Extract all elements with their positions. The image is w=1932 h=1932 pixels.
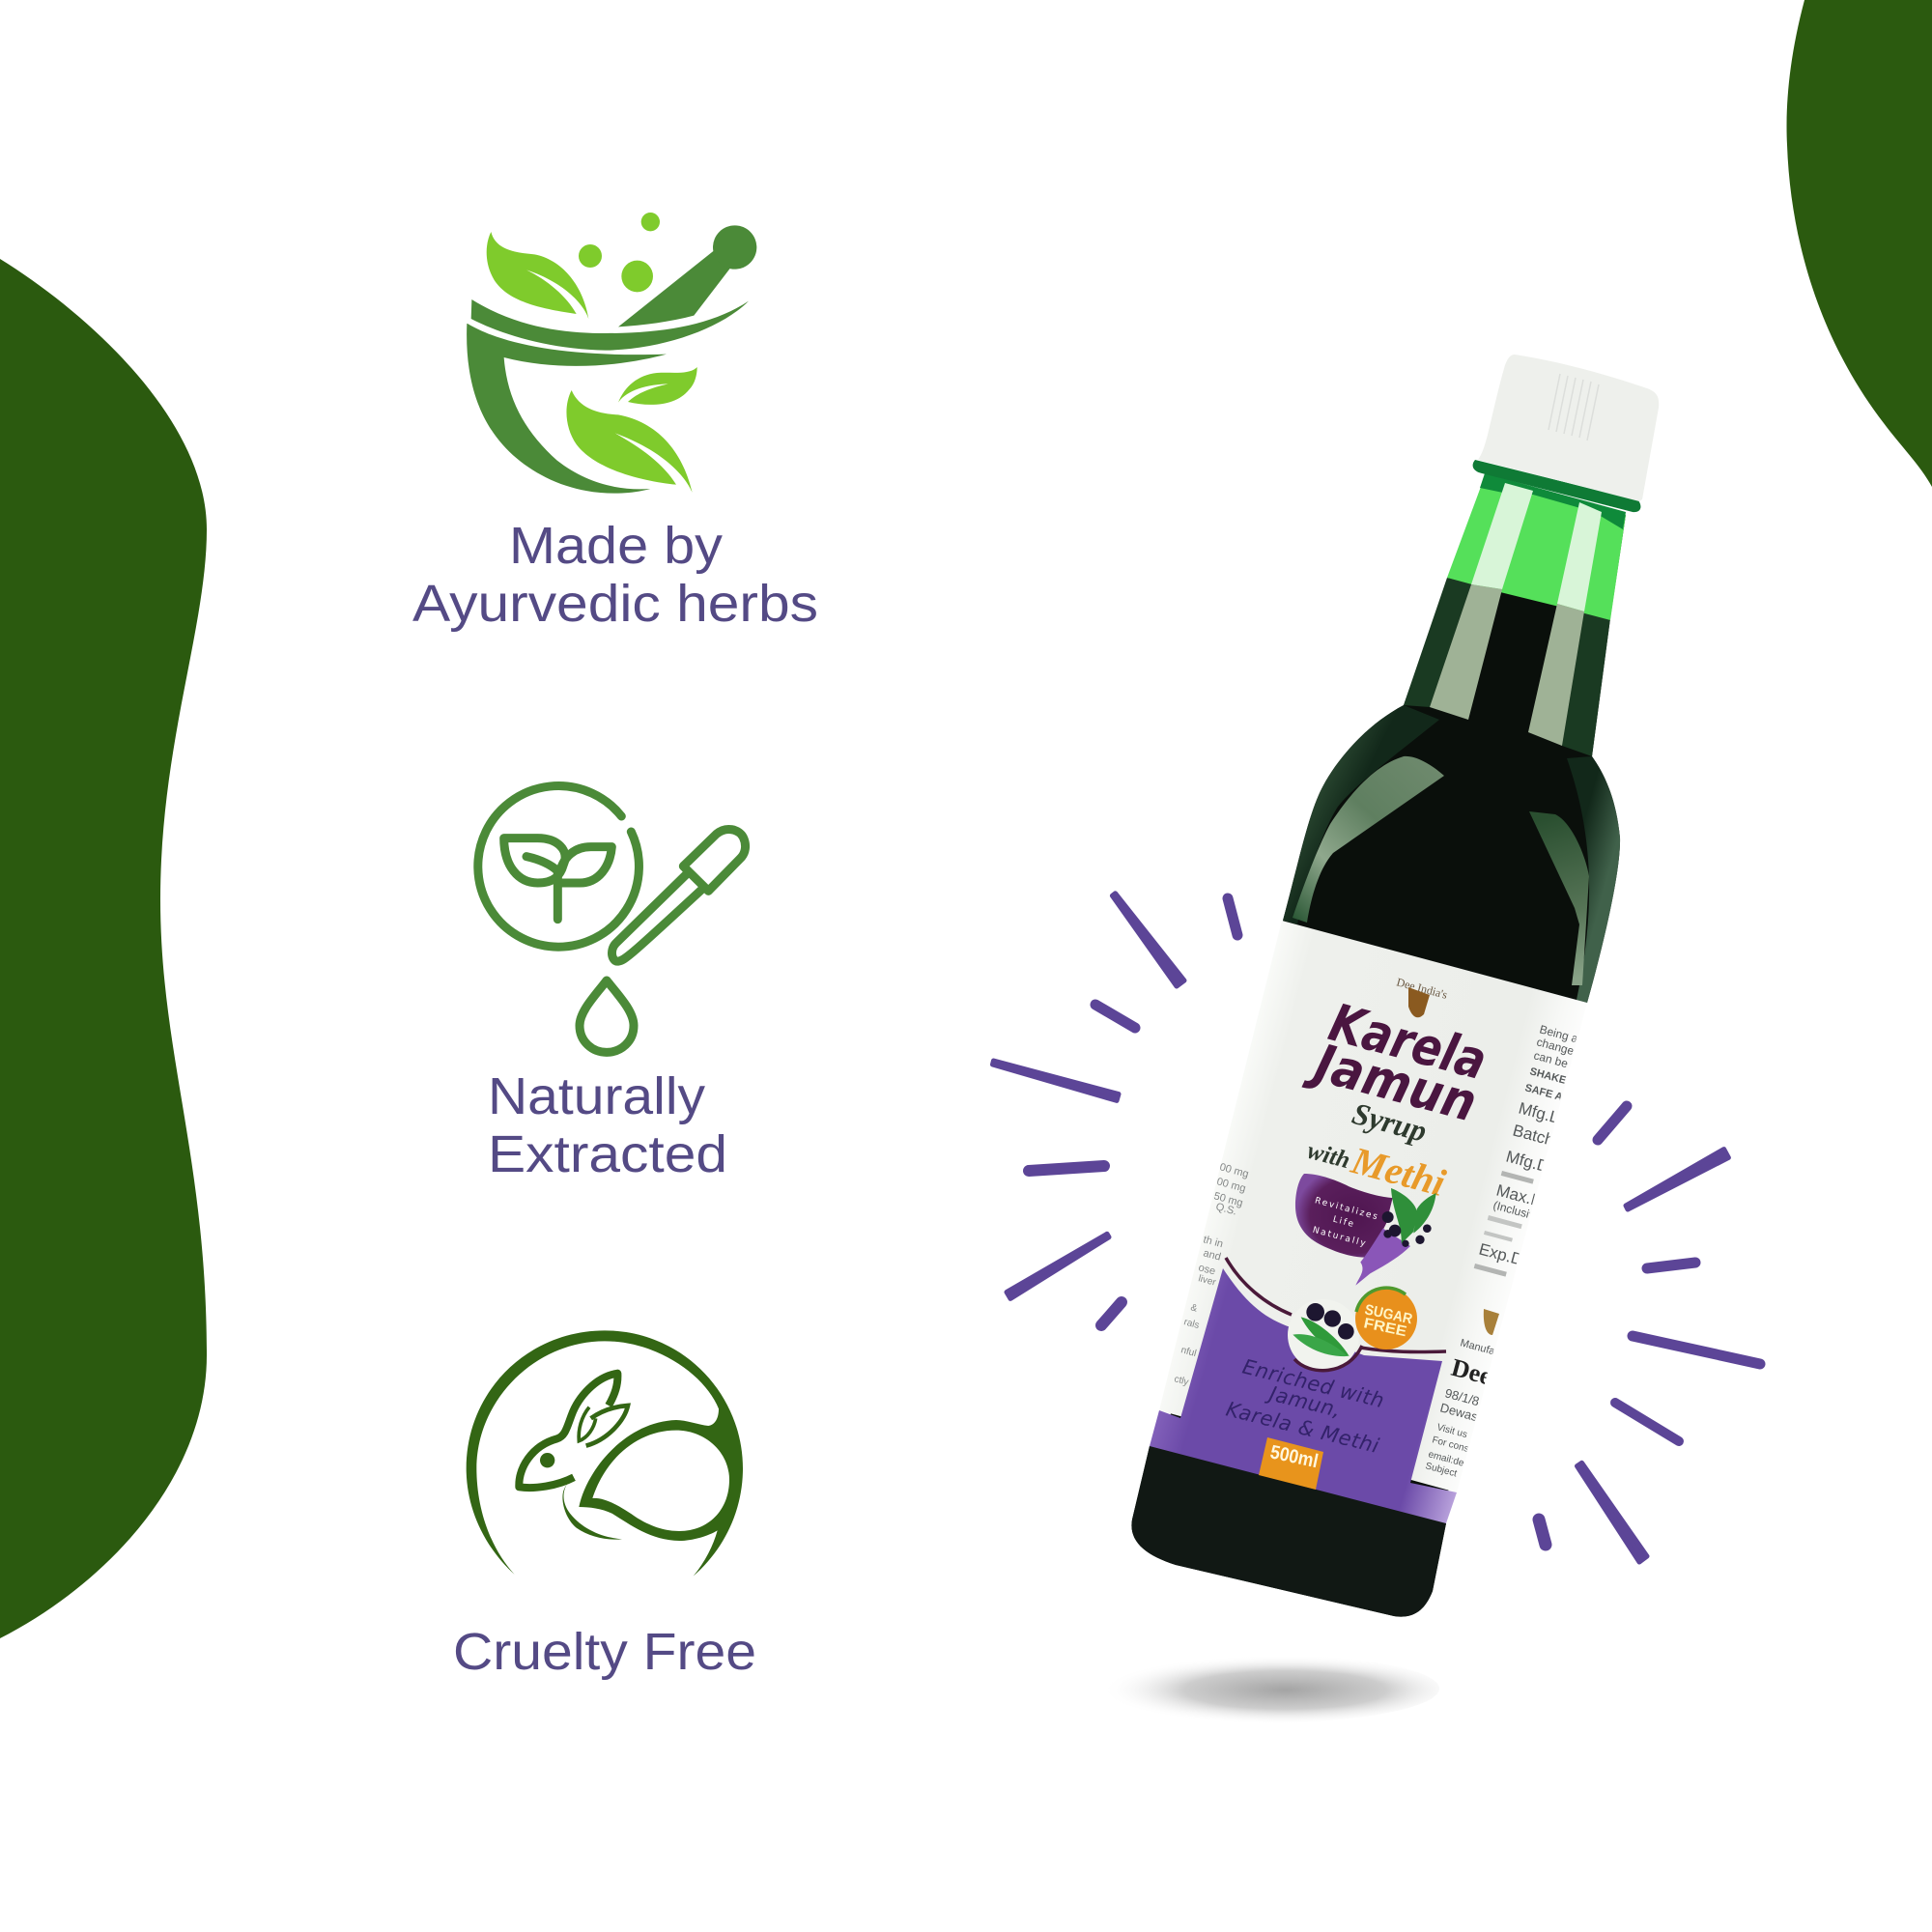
sugar free badge: FREE [1362,1315,1408,1340]
liver illustration [1295,1174,1436,1286]
left label side text: ose [1197,1262,1216,1277]
enriched text: Jamun, [1264,1381,1343,1422]
left label side text: nful [1179,1345,1198,1359]
left label side text: ctly [1173,1374,1190,1388]
left label side text: liver [1197,1273,1217,1289]
background blob: top right [1787,0,1932,487]
right label side text: (Inclusive [1492,1198,1543,1224]
500ml tag: 500ml [1268,1441,1320,1472]
manufacturer block: For cons [1431,1435,1470,1455]
neck reflections upper [1471,483,1602,611]
feature: cruelty free [453,1330,756,1681]
manufacturer block: email:de [1427,1449,1465,1469]
purple label band [1150,1268,1457,1523]
liver illustration: Life [1332,1215,1355,1230]
liver illustration: Naturally [1312,1226,1368,1249]
caption: cruelty free: Cruelty Free [453,1623,756,1681]
right label side text [1474,1022,1580,1277]
left label side text: & [1189,1302,1199,1315]
icon: mortar, pestle and leaves [467,213,756,494]
caption: made by ayurvedic herbs: Made by [509,517,723,575]
product name: Jamun [1301,1031,1483,1134]
right label side text: change [1535,1035,1576,1058]
right label side text: SHAKE W [1528,1065,1580,1091]
neck ring [1473,460,1640,512]
manufacturer block [1426,1309,1499,1476]
product: bottle [1131,355,1659,1617]
manufacturer block: Dee I [1448,1353,1510,1395]
right label side text: can be [1532,1048,1570,1070]
left label side text: 50 mg [1212,1190,1244,1209]
manufacturer block: Manufact [1459,1337,1504,1360]
bottle shadow [1072,1654,1439,1723]
background blob: left [0,259,207,1638]
shoulder highlight left [1293,756,1444,923]
dark green band under ring [1480,473,1626,529]
white label [1159,921,1587,1492]
white cap [1478,355,1659,501]
left label side text: 00 mg [1215,1176,1247,1195]
right label side text: Mfg.Da [1504,1148,1560,1179]
brand logo top: Dee India's [1395,975,1449,1002]
right label side text: Max.R [1494,1181,1545,1211]
manufacturer block: Dewas [1438,1400,1480,1424]
shoulder edge tint right [1567,756,1620,1003]
neck edge tint [1404,578,1610,756]
500ml tag [1259,1437,1323,1490]
caption: naturally extracted: Extracted [488,1125,727,1183]
icon: rabbit in circle [467,1330,743,1577]
enriched text: Karela & Methi [1224,1398,1381,1458]
product name [1301,992,1492,1134]
badge lower arc [1294,1346,1362,1371]
left label side text: th in [1202,1234,1224,1250]
green neck [1447,476,1626,620]
caption: made by ayurvedic herbs [412,517,818,633]
with text: with [1304,1138,1352,1174]
brand logo top [1395,975,1449,1017]
caption: naturally extracted: Naturally [488,1067,705,1125]
white badge circle [1288,1299,1359,1371]
syrup text: Syrup [1349,1095,1431,1149]
neck reflections lower [1430,584,1584,746]
left label side text: rals [1182,1317,1201,1331]
right label side text: SAFE AY [1523,1082,1571,1105]
feature: made by ayurvedic herbs [412,213,818,633]
left label side text: Q.S. [1214,1201,1238,1218]
bottle body [1131,476,1626,1617]
karela and jamun illustration [1293,1303,1354,1356]
product name: Karela [1323,992,1492,1092]
enriched text: Enriched with [1240,1355,1386,1412]
left label side text [1173,1161,1250,1388]
manufacturer block: 98/1/8 [1443,1385,1481,1408]
bottle lower tone [1131,1446,1446,1617]
methi text: Methi [1347,1138,1450,1205]
icon: sprout in circle with dropper and drop [478,786,746,1052]
sugar free badge [1355,1288,1417,1350]
shoulder highlight right [1529,811,1589,985]
manufacturer block: Subject [1424,1461,1459,1480]
caption: naturally extracted [488,1067,727,1183]
right label side text: Batch N [1511,1122,1572,1154]
feature: naturally extracted [478,786,746,1183]
left label side text: 00 mg [1218,1161,1250,1180]
left label side text: and [1202,1247,1222,1264]
cap ribbing [1548,374,1599,440]
sugar free badge: SUGAR [1363,1301,1414,1327]
manufacturer block: Visit us [1435,1422,1468,1440]
label curve line [1226,1258,1446,1352]
right label side text: Being a [1538,1022,1579,1046]
caption: made by ayurvedic herbs: Ayurvedic herbs [412,575,818,633]
shoulder edge tint left [1283,705,1439,924]
right label side text: Exp.Da [1477,1240,1534,1271]
enriched text [1224,1355,1386,1458]
burst lines around bottle [993,894,1760,1562]
liver illustration: Revitalizes [1314,1196,1379,1222]
right label side text: Mfg.Lic [1517,1099,1573,1130]
